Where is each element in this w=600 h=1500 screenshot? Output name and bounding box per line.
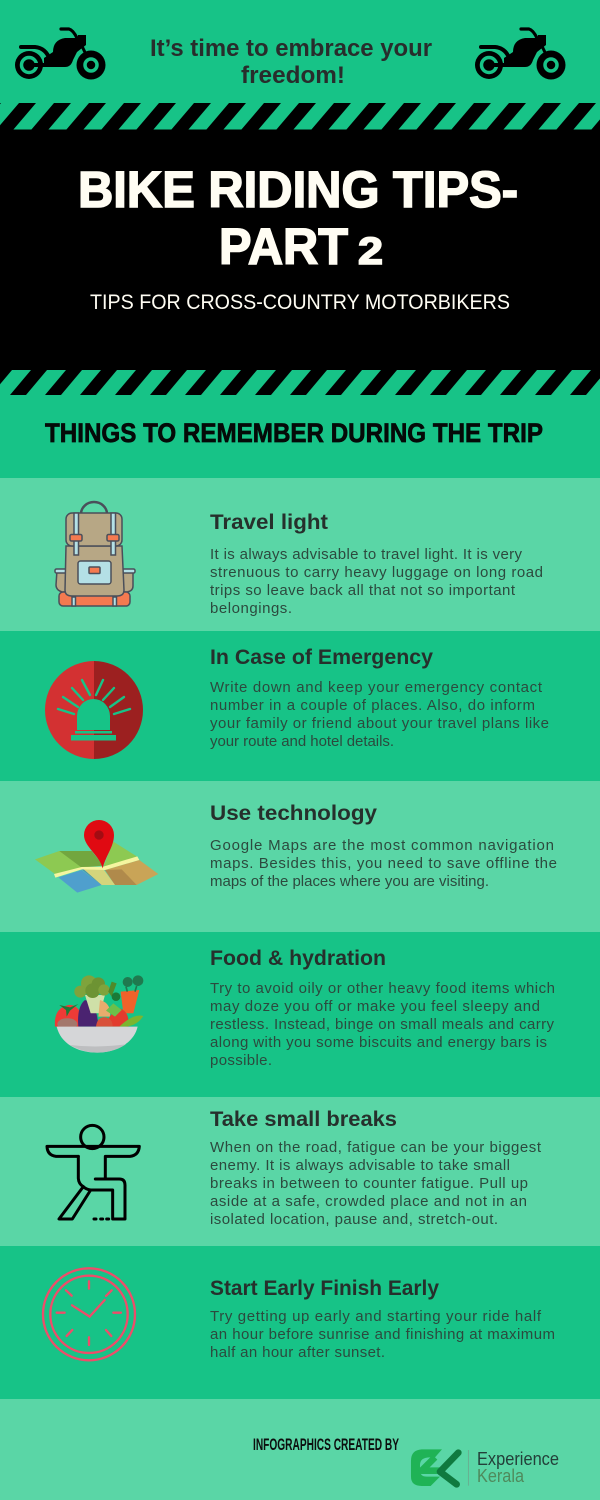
tagline: It’s time to embrace your xyxy=(150,35,432,62)
panel: in case of emergency xyxy=(0,631,600,781)
icon: map with pin xyxy=(35,820,158,893)
logo: Experience Kerala: Experience xyxy=(477,1449,559,1469)
icon: siren xyxy=(45,661,143,759)
header tagline panel xyxy=(15,29,566,89)
tagline: freedom! xyxy=(241,62,345,89)
hazard stripes top xyxy=(0,103,600,130)
body text: aside at a safe, crowded place and not in an xyxy=(210,1193,527,1210)
body text: Google Maps are the most common navigation xyxy=(210,837,554,854)
panel: travel light xyxy=(0,478,600,631)
panel: take small breaks xyxy=(0,1097,600,1246)
icon: stretching figure xyxy=(47,1125,139,1219)
panel: use technology xyxy=(0,781,600,932)
subtitle: TIPS FOR CROSS-COUNTRY MOTORBIKERS xyxy=(90,290,510,314)
logo: Experience Kerala: Kerala xyxy=(477,1466,525,1486)
body text: possible. xyxy=(210,1052,272,1069)
main title xyxy=(78,161,518,275)
heading: Travel light xyxy=(210,511,328,534)
heading: In Case of Emergency xyxy=(210,646,433,669)
icon: backpack xyxy=(55,502,135,606)
body text: strenuous to carry heavy luggage on long road xyxy=(210,564,543,581)
body text: restless. Instead, binge on small meals and carry xyxy=(210,1016,554,1033)
body text: your family or friend about your travel plans like xyxy=(210,715,549,732)
main title: BIKE RIDING TIPS- xyxy=(78,161,518,218)
tagline xyxy=(150,35,432,89)
body text: half an hour after sunset. xyxy=(210,1344,385,1361)
panel: food and hydration xyxy=(0,932,600,1097)
main title: 2 xyxy=(358,231,383,273)
body text: maps of the places where you are visiting. xyxy=(210,873,489,890)
body text xyxy=(210,679,549,750)
body text: Try to avoid oily or other heavy food items which xyxy=(210,980,555,997)
icon: motorbike right xyxy=(475,29,566,80)
body text: isolated location, pause and, stretch-out. xyxy=(210,1211,498,1228)
body text: enemy. It is always advisable to take small xyxy=(210,1157,510,1174)
heading: Food & hydration xyxy=(210,947,386,970)
title band xyxy=(0,130,600,395)
panel: footer credit xyxy=(0,1399,600,1500)
icon: motorbike left xyxy=(15,29,106,80)
body text: along with you some biscuits and energy bars is xyxy=(210,1034,547,1051)
body text: When on the road, fatigue can be your biggest xyxy=(210,1139,542,1156)
heading: Use technology xyxy=(210,802,377,825)
body text xyxy=(210,980,555,1069)
body text: number in a couple of places. Also, do inform xyxy=(210,697,535,714)
logo: Experience Kerala xyxy=(411,1449,559,1486)
body text xyxy=(210,1139,542,1228)
body text xyxy=(210,546,543,617)
section heading: THINGS TO REMEMBER DURING THE TRIP xyxy=(45,418,543,448)
body text xyxy=(210,1308,555,1361)
body text: belongings. xyxy=(210,600,292,617)
body text: may doze you off or make you feel sleepy and xyxy=(210,998,540,1015)
icon: clock xyxy=(43,1268,135,1360)
body text: It is always advisable to travel light. It is very xyxy=(210,546,522,563)
body text: your route and hotel details. xyxy=(210,733,394,750)
hazard stripes bottom xyxy=(0,370,600,395)
credit text: INFOGRAPHICS CREATED BY xyxy=(253,1436,399,1454)
body text: Try getting up early and starting your ride half xyxy=(210,1308,542,1325)
body text: Write down and keep your emergency contact xyxy=(210,679,543,696)
body text: maps. Besides this, you need to save offline the xyxy=(210,855,557,872)
body text: breaks in between to counter fatigue. Pull up xyxy=(210,1175,528,1192)
main title: PART xyxy=(219,218,348,275)
heading: Start Early Finish Early xyxy=(210,1277,439,1300)
icon: vegetable bowl xyxy=(55,975,143,1053)
body text: trips so leave back all that not so important xyxy=(210,582,516,599)
body text xyxy=(210,837,557,890)
body text: an hour before sunrise and finishing at maximum xyxy=(210,1326,555,1343)
heading: Take small breaks xyxy=(210,1108,397,1131)
panel: start early finish early xyxy=(0,1246,600,1399)
